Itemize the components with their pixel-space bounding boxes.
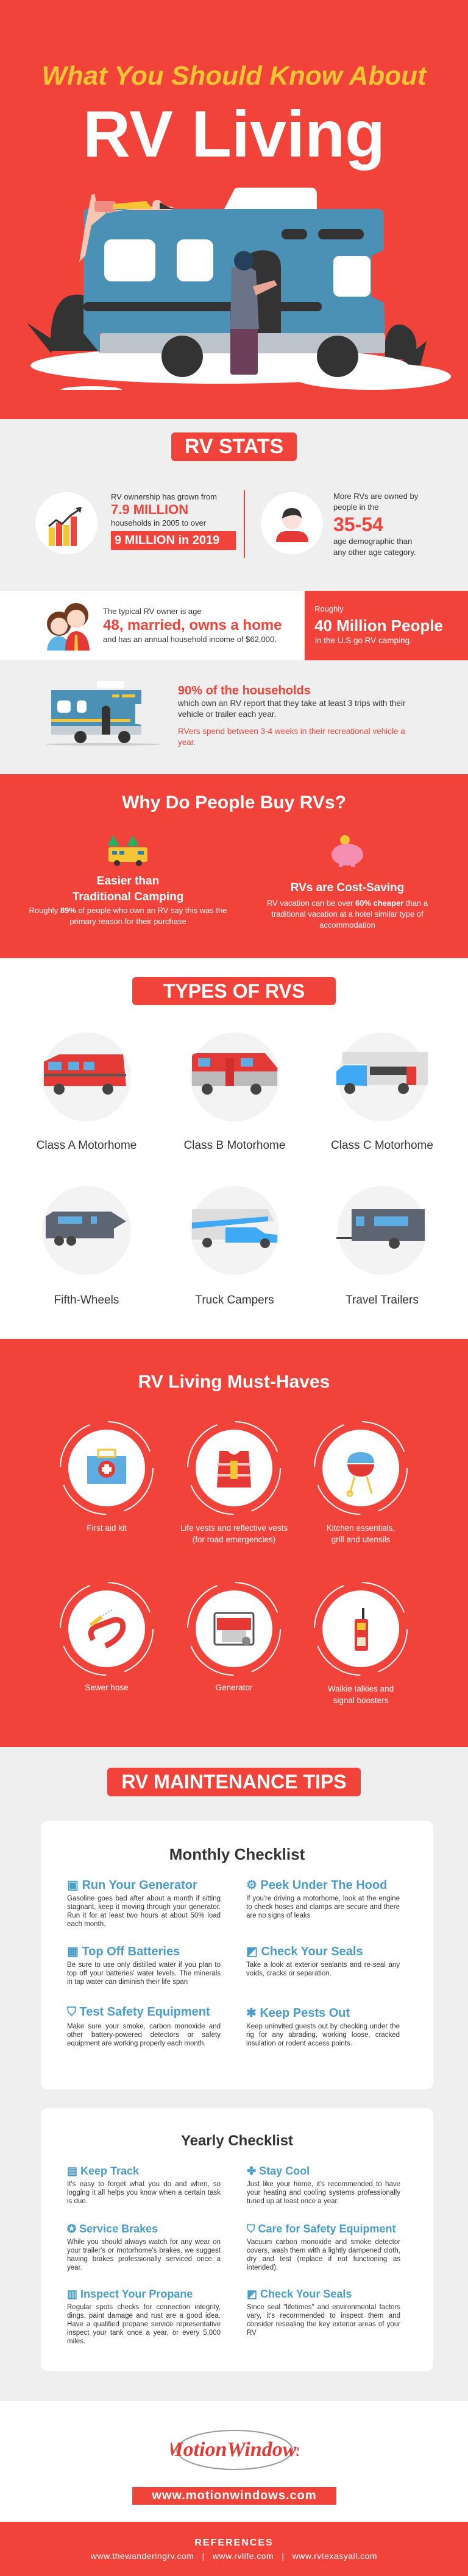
panel: yearly checklist: Regular spots checks for connection integrity, dings, paint damage and rust are a good idea. Have a qualified propane service representative inspect your tank once a year, or every 5,000 miles. <box>67 2304 221 2345</box>
type: fifth-wheels <box>42 1186 131 1307</box>
item: sewer hose: Sewer hose <box>85 1683 129 1692</box>
item: generator: Generator <box>216 1683 252 1692</box>
item: walkie talkies: Walkie talkies and <box>328 1684 394 1693</box>
hero illustration: RV with people <box>27 188 451 390</box>
footer: references <box>0 2522 468 2576</box>
logo: motion windows <box>171 2430 299 2470</box>
badge: RV maintenance tips <box>107 1768 361 1796</box>
tip: run your generator: ▣ Run Your Generator <box>67 1879 197 1892</box>
reason: easier than camping: Roughly 89% of people who own an RV say this was the primary reason for their purchase <box>29 906 227 926</box>
text: age 48 married: 48, married, owns a home <box>103 617 282 633</box>
type: class B <box>184 1032 285 1152</box>
heading: Monthly Checklist <box>169 1845 305 1863</box>
item: life vests <box>180 1421 288 1544</box>
reason: easier than camping <box>29 835 227 926</box>
heading: Yearly Checklist <box>181 2133 293 2149</box>
tip: care for safety equipment: ⛉ Care for Safety Equipment <box>247 2223 396 2235</box>
stat: RV ownership growth <box>35 492 236 554</box>
panel: monthly checklist: Be sure to use only distilled water if you plan to top off your batteries' water levels. The minerals in tap water can diminish their life span <box>67 1961 221 1986</box>
text: ownership stats: 7.9 MILLION <box>111 502 188 517</box>
text: trips: which own an RV report that they take at least 3 trips with their vehicle or trailer each year. <box>178 699 405 719</box>
panel: yearly checklist <box>41 2108 433 2371</box>
tip: check your seals: ◩ Check Your Seals <box>246 1945 363 1958</box>
heading: Why Do People Buy RVs? <box>122 792 346 813</box>
panel: yearly checklist: Just like your home, it's recommended to have your heating and cooling systems professionally tuned up at least once a year. <box>247 2181 400 2205</box>
text: 35-54: people in the age demographic than <box>333 503 412 546</box>
heading: RV Living Must-Haves <box>138 1372 330 1392</box>
tip: check your seals: ◩ Check Your Seals <box>247 2288 352 2300</box>
panel: yearly checklist: While you should always watch for any wear on your trailer's or motorhome's brakes, we suggest having brakes professionally serviced once a year. <box>67 2239 221 2271</box>
type: class C <box>331 1032 433 1152</box>
text: ownership stats: RV ownership has grown from <box>111 492 217 501</box>
item: first aid kit <box>60 1421 154 1533</box>
panel: monthly checklist: Keep uninvited guests out by checking under the rig for any abrading, working loose, cracked insulation or rodent access points. <box>246 2023 400 2047</box>
tip: stay cool: ✤ Stay Cool <box>247 2165 310 2177</box>
panel: monthly checklist: If you're driving a motorhome, look at the engine to check hoses and clamps are secure and there are no signs of leaks <box>246 1895 400 1919</box>
footer: references: www.thewanderingrv.com | www.rvlife.com | www.rvtexasyall.com <box>91 2551 377 2561</box>
icon: piggy bank <box>332 835 363 867</box>
footer: references: REFERENCES <box>194 2538 274 2548</box>
text: ownership stats: households in 2005 to over <box>111 518 206 528</box>
badge: RV STATS <box>171 432 297 461</box>
text: trips <box>178 684 406 747</box>
item: kitchen: grill and utensils <box>332 1535 390 1544</box>
text: trips: RVers spend between 3-4 weeks in their recreational vehicle a year. <box>178 727 405 747</box>
stat: age demographic <box>261 492 418 557</box>
panel: monthly checklist: Take a look at exterior sealants and re-seal any voids, cracks or separation. <box>246 1961 400 1977</box>
callout: 40 million: in the U.S go RV camping. <box>315 636 412 645</box>
section: types of RVs <box>0 958 468 1339</box>
title: what you should know about: What You Should Know About <box>41 61 427 91</box>
badge: types of RVs: TYPES OF RVS <box>163 980 305 1002</box>
website bar <box>132 2487 336 2505</box>
reason: cost saving: RV vacation can be over 60% cheaper than a traditional vacation at a hotel similar type of accommodation <box>267 898 428 930</box>
reason: cost saving <box>267 835 428 930</box>
section: must-haves <box>0 1339 468 1747</box>
item: first aid kit: First aid kit <box>87 1523 127 1533</box>
icon: person <box>261 492 323 554</box>
panel: yearly checklist: It's easy to forget what you do and when, so logging it all helps you know when a certain task is due. <box>67 2181 221 2205</box>
panel: monthly checklist <box>41 1821 433 2089</box>
item: walkie talkies: signal boosters <box>333 1696 388 1705</box>
reason: easier than camping: Easier than <box>97 875 159 887</box>
badge: types of RVs <box>132 977 336 1005</box>
panel: monthly checklist: Make sure your smoke, carbon monoxide and other battery-powered detectors or safety equipment are working properly each month. <box>67 2023 221 2047</box>
type: travel trailers: Travel Trailers <box>346 1294 419 1307</box>
badge: RV maintenance tips: RV MAINTENANCE TIPS <box>121 1771 347 1793</box>
item: sewer hose <box>60 1582 154 1692</box>
item: life vests: Life vests and reflective vests (for road emergencies) <box>180 1523 288 1544</box>
item: generator <box>187 1582 281 1692</box>
icon: growth chart <box>35 492 98 554</box>
callout: 40 million: 40 Million People <box>314 616 443 635</box>
icon: camper with trees <box>107 835 147 866</box>
band: typical owner <box>0 591 305 660</box>
type: truck campers <box>190 1186 279 1307</box>
panel: monthly checklist: Gasoline goes bad after about a month if sitting stagnant, keep it moving through your generator. Run it for at least two hours at about 50% load each month. <box>67 1895 221 1928</box>
man <box>230 305 258 375</box>
item: kitchen: Kitchen essentials, <box>327 1523 395 1533</box>
icon: couple <box>47 603 90 651</box>
text: age 48 married: The typical RV owner is age and has an annual household income of $62,000. <box>103 607 277 644</box>
type: class B: Class B Motorhome <box>184 1139 285 1152</box>
tip: peek under the hood: ⚙ Peek Under The Hood <box>246 1879 387 1892</box>
item: walkie talkies <box>314 1582 408 1705</box>
text: trips: 90% of the households <box>178 684 311 697</box>
hero section <box>0 0 468 419</box>
tip: keep track: ▤ Keep Track <box>67 2165 139 2177</box>
type: truck campers: Truck Campers <box>195 1294 274 1307</box>
stat: 90% households <box>45 681 406 747</box>
item: kitchen <box>314 1421 408 1544</box>
type: class A <box>37 1032 136 1152</box>
woman <box>79 194 174 262</box>
badge: RV STATS: RV STATS <box>185 435 283 458</box>
tip: keep pests out: ✱ Keep Pests Out <box>246 2006 350 2020</box>
text: ownership stats <box>111 492 236 550</box>
tip: service brakes: ✪ Service Brakes <box>67 2223 158 2235</box>
text: 35-54: any other age category. <box>333 548 416 557</box>
tip: top off batteries: ▦ Top Off Batteries <box>67 1945 180 1958</box>
type: class C: Class C Motorhome <box>331 1139 433 1152</box>
text: 35-54: 35-54 <box>333 513 383 535</box>
text: 35-54 <box>333 492 418 557</box>
reason: cost saving: RVs are Cost-Saving <box>291 881 404 894</box>
callout: 40 million <box>305 591 468 660</box>
section: why do people buy RVs <box>0 774 468 958</box>
tip: inspect propane: ▥ Inspect Your Propane <box>67 2288 193 2300</box>
reason: easier than camping: Traditional Camping <box>73 891 183 903</box>
text: ownership stats: 9 MILLION in 2019 <box>115 534 219 547</box>
title: RV Living: RV Living <box>83 97 385 171</box>
type: class A: Class A Motorhome <box>37 1139 136 1152</box>
icon: small RV <box>45 681 161 746</box>
tip: test safety equipment: ⛉ Test Safety Equipment <box>67 2005 210 2019</box>
text: 35-54: More RVs are owned by <box>333 492 418 501</box>
type: travel trailers <box>336 1186 427 1307</box>
panel: yearly checklist: Vacuum carbon monoxide and smoke detector covers, wash them with a lightly dampened cloth, dry and test (replace if not functioning as intended). <box>247 2239 400 2271</box>
website bar: www.motionwindows.com <box>152 2489 317 2502</box>
panel: yearly checklist: Since seal "lifetimes" and environmental factors vary, it's recommended to inspect them and consider resealing the key exterior areas of your RV <box>247 2304 400 2337</box>
type: fifth-wheels: Fifth-Wheels <box>54 1294 119 1307</box>
footer: logo and website <box>0 2401 468 2522</box>
callout: 40 million: Roughly <box>314 604 344 613</box>
